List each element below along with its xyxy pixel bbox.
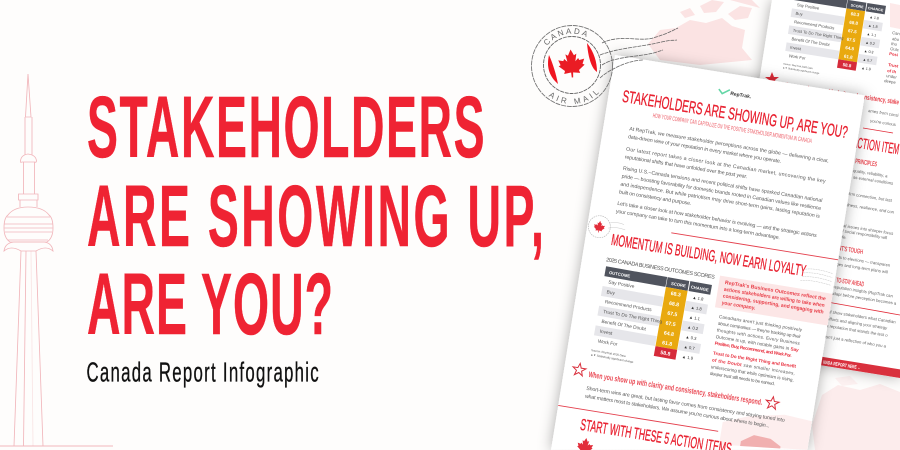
back sheet: text fragments: efforts and aligning your strategy: [827, 316, 888, 331]
closing text: Short-term wins are great, but lasting favor comes from consistency and staying tuned into: [586, 386, 785, 424]
back sheet: bottom red band: [717, 340, 900, 378]
CN Tower illustration: [0, 74, 113, 446]
back sheet: text fragments: dness, resilience, and con: [846, 202, 895, 215]
divider: [558, 405, 718, 431]
table: business outcomes scores: 64.8: [663, 330, 674, 338]
page map decoration: [719, 405, 812, 450]
back sheet: bottom red band: NADA REPORT HERE ←: [823, 360, 861, 372]
table: business outcomes scores: SCORE: [671, 281, 686, 288]
back sheet: table: Work For: [788, 53, 806, 61]
intro text: data-driven view of your reputation in every market where you operate.: [628, 134, 782, 165]
table: business outcomes scores: 67.5: [665, 321, 676, 328]
air mail stamp: CANADA: [544, 28, 586, 45]
table: business outcomes scores: Source: RepTrak 2025 Data: [591, 348, 626, 358]
headline: ARE SHOWING UP,: [87, 167, 544, 265]
back sheet: table: ▲ 0.7: [862, 58, 872, 63]
intro text: reputational shifts that have unfolded over the past year.: [624, 154, 748, 180]
table: business outcomes scores: 67.5: [667, 311, 678, 318]
back sheet: table: 67.5: [848, 28, 858, 35]
logo: RepTrak: [718, 88, 752, 100]
subtitle: Canada Report Infographic: [86, 356, 319, 388]
callout: business outcomes: considering, supporting, and engaging with: [722, 293, 824, 316]
right column text: Outcome is up, with notable gains in Say: [715, 334, 800, 353]
back sheet: table: ▲ 1.8: [868, 24, 878, 29]
closing text: what matters most to stakeholders. We assume you're curious about where to begin...: [585, 394, 770, 429]
table: business outcomes scores: Benefit Of The Doubt: [601, 319, 647, 333]
back sheet: table: ▲ 1.1: [866, 32, 876, 38]
back sheet: text fragments: al issues into sharper focus: [843, 223, 894, 236]
right column text: underscoring that while optimism is rising,: [711, 364, 794, 383]
table: business outcomes scores: ▲ 1.1: [689, 314, 701, 321]
back sheet: text fragments: Outc: [890, 46, 899, 52]
callout: business outcomes: [715, 276, 833, 325]
back sheet: text fragments: you're curious: [870, 118, 896, 127]
back sheet: text fragments: Can: [892, 30, 900, 36]
table: business outcomes scores: Trust To Do The Right Thing: [603, 309, 663, 325]
back sheet: table: ▲ 0.3: [864, 49, 874, 55]
back sheet: text fragments: deepe: [884, 78, 897, 85]
back sheet: text fragments: as external conditions: [853, 175, 894, 186]
back sheet: text fragments: life.: [840, 234, 847, 240]
back sheet: table: 68.8: [849, 20, 859, 26]
right column text: about companies — they're backing up their: [718, 321, 802, 339]
table: business outcomes scores: Invest: [599, 329, 613, 337]
table: business outcomes scores: CHANGE: [690, 284, 709, 292]
back sheet: table: [782, 0, 886, 84]
back sheet: table: CHANGE: [867, 6, 884, 13]
right column text: Positive, Buy, Recommend, and Work For.: [714, 341, 792, 358]
back sheet: text fragments: quality, reliability, a: [853, 168, 889, 179]
back sheet: text fragments: Posi: [889, 51, 898, 57]
back sheet: text fragments: under: [886, 73, 898, 80]
table: business outcomes scores: ▲ 1.8: [692, 295, 705, 302]
back sheet: text fragments: Trust: [888, 62, 899, 69]
map sheet: pink Canada map, bottom right: [812, 376, 900, 450]
back sheet paper: [717, 0, 900, 378]
intro text: and independence. But while patriotism may drive short-term gains, lasting reputation is: [620, 182, 821, 220]
map sheet: pink Canada map, top: [648, 0, 760, 65]
table: business outcomes scores: Buy: [606, 289, 616, 297]
back sheet: table: Trust To Do The Right Thing: [793, 28, 845, 41]
back sheet: table: 61.8: [844, 54, 854, 60]
icon: star right: [765, 396, 780, 410]
back sheet: text fragments: [825, 30, 900, 349]
back sheet: text fragments: d social responsibility will: [841, 228, 888, 240]
back sheet: text fragments: a reputation that stands the test o: [826, 323, 889, 338]
back sheet: table: 64.8: [845, 45, 855, 51]
table: business outcomes scores: ▲▼ Statistically significant change: [590, 352, 634, 364]
table: business outcomes scores: ▲ 1.8: [690, 305, 703, 312]
back sheet: table: 68.3: [850, 11, 860, 18]
table: business outcomes scores: 68.3: [670, 291, 681, 299]
back sheet: text fragments: isn't just a reflection of who you a: [825, 334, 887, 349]
table: business outcomes scores: [590, 266, 712, 375]
right column text: Trust to Do the Right Thing and Benefit: [713, 351, 797, 369]
headline: STAKEHOLDERS: [87, 78, 484, 176]
back sheet: text fragments: d show stakeholders what Canadian: [829, 309, 897, 325]
main report page: [551, 55, 865, 450]
back sheet: text fragments: of th: [887, 68, 897, 74]
back sheet: table: Say Positive: [797, 2, 820, 11]
table: business outcomes scores: ▲ 0.3: [685, 334, 698, 341]
back sheet: text fragments: PRINCIPLES: [855, 158, 878, 168]
right column text: deeper trust still needs to be earned.: [709, 371, 775, 386]
divider: [671, 233, 838, 260]
postmark lines: [800, 267, 833, 285]
back sheet: report page with table and action items: [717, 0, 900, 378]
table: business outcomes scores: ▲ 0.2: [687, 324, 699, 331]
callout: business outcomes: your company.: [721, 300, 756, 312]
back sheet: table: Benefit Of The Doubt: [791, 36, 831, 47]
table: business outcomes scores: 58.8: [660, 350, 671, 358]
back sheet: table: ▲ 0.2: [865, 41, 875, 46]
back sheet: table: SCORE: [850, 3, 864, 9]
back sheet: table: ▲ 1.9: [861, 66, 871, 71]
back sheet: table: Source: RepTrak 2025 Data: [783, 63, 813, 70]
table: business outcomes scores: ▲ 1.9: [682, 354, 694, 361]
icon: star left: [572, 362, 587, 376]
table: business outcomes scores: OUTCOME: [609, 270, 631, 279]
table title: 2025 CANADA BUSINESS OUTCOMES SCORES: [606, 257, 715, 281]
back sheet: table: ▲▼ Statistically significant change: [782, 66, 820, 75]
air mail stamp: AIR MAIL: [548, 91, 599, 104]
intro text: [615, 126, 830, 247]
icon: maple leaf: [576, 437, 594, 450]
headline: ARE YOU?: [87, 255, 333, 353]
intro text: pride — boosting favorability for domestic brands rooted in Canadian values like resilience: [621, 174, 822, 212]
intro text: Let's take a closer look at how stakeholder behavior is evolving — and the strategic actions: [617, 201, 818, 239]
intro text: At RepTrak, we measure stakeholder perceptions across the globe — delivering a clear,: [629, 126, 829, 165]
intro text: Rising U.S.–Canada tensions and recent political shifts have sparked Canadian national: [622, 166, 823, 204]
back sheet: text fragments: reputation insights (RepTrak can: [833, 284, 894, 299]
back sheet: text fragments: abo: [892, 36, 900, 42]
intro text: Our latest report takes a closer look at the Canadian market, uncovering the key: [626, 147, 826, 185]
callout: business outcomes: RepTrak's Business Outcomes reflect the: [724, 280, 826, 302]
back sheet: table: 67.5: [846, 37, 856, 43]
table: business outcomes scores: ▲ 0.7: [683, 344, 696, 351]
small stamp: [587, 214, 627, 242]
back sheet: table: Buy: [795, 11, 804, 17]
back sheet: text fragments: adapt before perception becomes a: [831, 291, 897, 306]
callout: business outcomes: actions stakeholders are willing to take when: [723, 287, 825, 309]
back sheet: text fragments: rifts to elections — transparen: [835, 254, 891, 268]
back sheet: text fragments: NT'S TOUGH: [838, 245, 864, 256]
table: business outcomes scores: 61.8: [662, 340, 673, 348]
back sheet: callout corner: [890, 3, 900, 29]
tagline: When you show up with clarity and consistency, stakeholders respond.: [588, 370, 763, 407]
back sheet: text fragments: ames from consi: [868, 108, 899, 118]
air mail stamp: [531, 25, 678, 107]
back sheet: table: ▲ 1.8: [869, 15, 879, 21]
table: business outcomes scores: 68.8: [668, 301, 680, 309]
right column text: [709, 314, 803, 389]
table: business outcomes scores: Recommend Products: [604, 299, 653, 313]
table: business outcomes scores: Say Positive: [608, 279, 635, 290]
right column text: Canadians aren't just thinking positively: [719, 314, 803, 333]
back sheet: star and tagline: [765, 72, 900, 106]
right column text: thoughts with actions. Every Business: [716, 327, 801, 346]
back sheet: table: 58.8: [842, 62, 852, 68]
logo: RepTrak: RepTrak.: [730, 91, 752, 100]
headline: [87, 78, 544, 353]
right column text: of the Doubt saw smaller increases,: [712, 357, 795, 376]
back sheet: text fragments: nges and long-term plans will: [834, 261, 888, 274]
intro text: your company can take to turn this momentum into a long-term advantage.: [615, 209, 780, 241]
back sheet: text fragments: tho: [891, 41, 898, 47]
intro text: built on consistency and purpose.: [619, 189, 692, 207]
back sheet: text fragments: TO-STAY AHEAD: [836, 277, 865, 288]
table: business outcomes scores: Work For: [597, 339, 618, 348]
back sheet: table: Invest: [790, 45, 802, 51]
back sheet: text fragments: firm connection, but last: [848, 191, 893, 203]
back sheet: table: Recommend Products: [794, 19, 835, 30]
